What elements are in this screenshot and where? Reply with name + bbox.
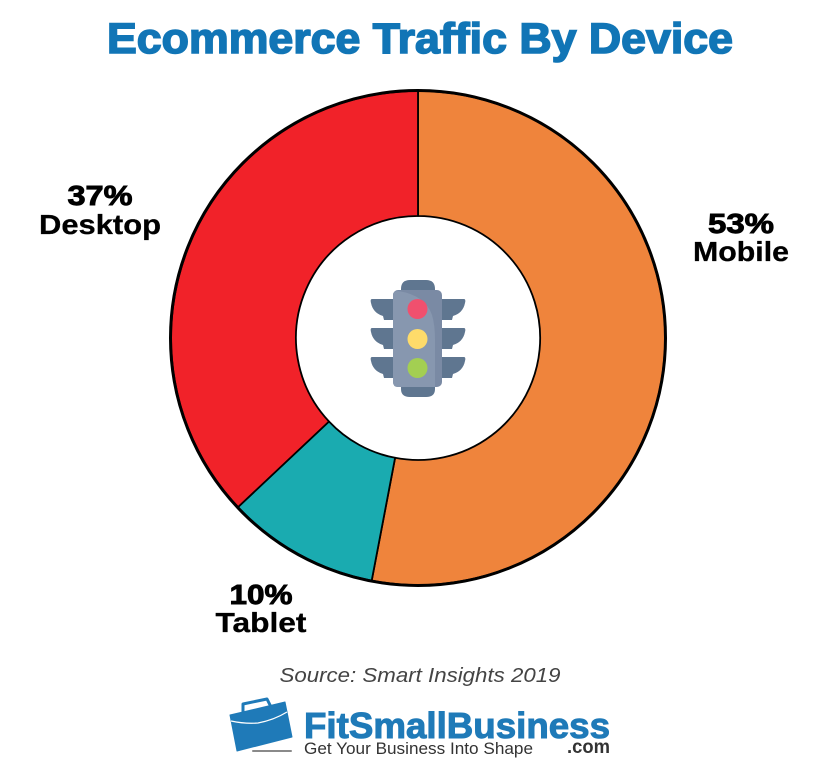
- donut chart: [170, 90, 666, 586]
- tagline: Get Your Business Into Shape: [304, 740, 533, 758]
- domain: .com: [567, 737, 610, 758]
- label: tablet: [216, 579, 306, 638]
- icon: traffic light: [371, 280, 465, 397]
- icon: briefcase: [230, 699, 292, 752]
- title: Ecommerce Traffic By Device: [107, 15, 733, 63]
- segment: mobile 53%: [372, 91, 665, 585]
- label: tablet: 10%: [230, 579, 293, 610]
- segment: desktop 37%: [171, 91, 418, 507]
- outer ring: [170, 90, 666, 586]
- segment: tablet 10%: [238, 422, 395, 581]
- logo: Fit Small Business: [230, 699, 610, 758]
- label: desktop: Desktop: [39, 209, 161, 240]
- source note: Source: Smart Insights 2019: [280, 665, 560, 687]
- label: tablet: Tablet: [216, 607, 306, 638]
- label: mobile: 53%: [708, 208, 774, 239]
- label: desktop: 37%: [68, 180, 133, 211]
- label: desktop: [39, 180, 161, 240]
- wordmark: FitSmallBusiness: [304, 705, 610, 746]
- label: mobile: [693, 208, 789, 267]
- label: mobile: Mobile: [693, 236, 789, 267]
